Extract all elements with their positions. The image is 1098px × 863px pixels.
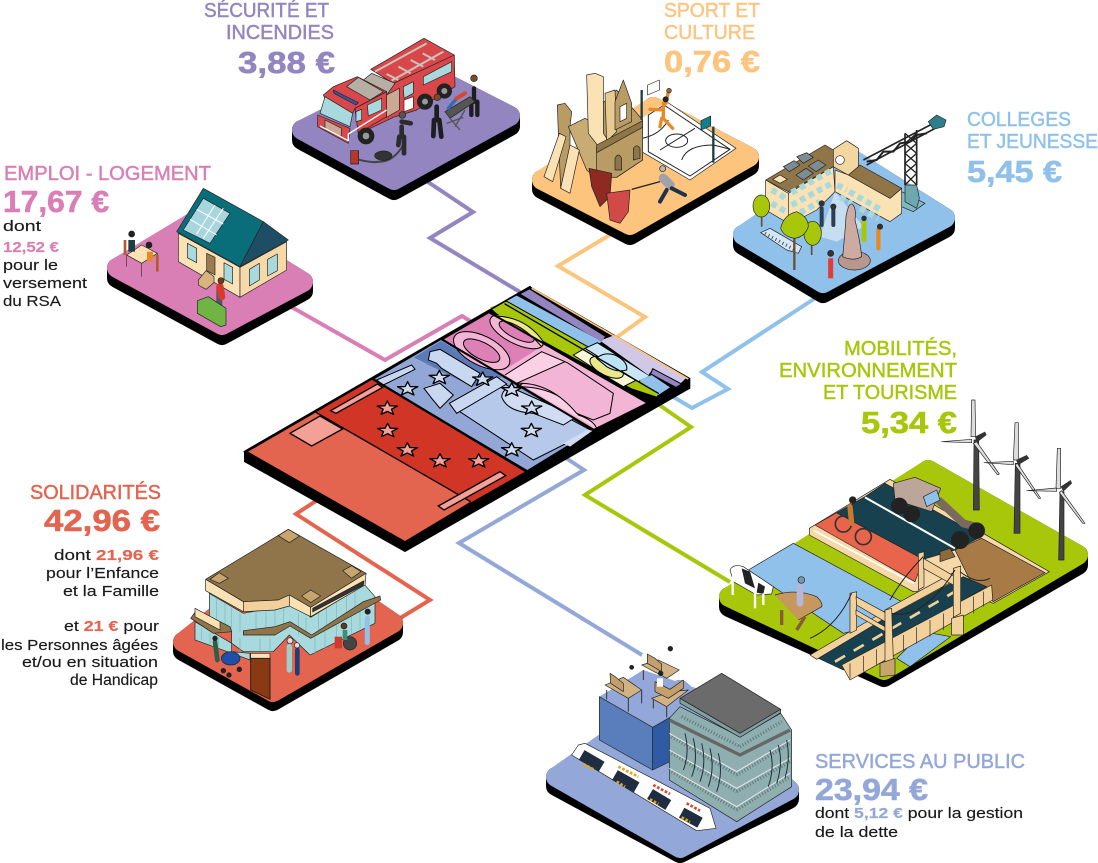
label: sport et culture: 0,76 € bbox=[664, 44, 760, 79]
panel: mobilités environnement et tourisme bbox=[729, 337, 1085, 680]
icon: castle, masks and sports court bbox=[544, 73, 736, 223]
label: solidarités: 42,96 € bbox=[44, 503, 160, 538]
label: sport et culture: SPORT ET bbox=[664, 0, 760, 22]
platform periwinkle bbox=[556, 690, 789, 853]
icon: school, crane, statue and students bbox=[753, 115, 946, 278]
label: solidarités: les Personnes âgées bbox=[1, 637, 158, 654]
label: solidarités: et/ou en situation bbox=[22, 654, 158, 671]
label: emploi logement: 12,52 € bbox=[3, 239, 60, 256]
label: emploi logement: pour le bbox=[3, 257, 58, 274]
label: mobilités: ET TOURISME bbox=[823, 382, 957, 404]
panel: sécurité et incendies bbox=[204, 0, 510, 190]
platform green bbox=[729, 470, 1078, 677]
label: collèges et jeunesse: 5,45 € bbox=[967, 154, 1062, 189]
label: services au public: SERVICES AU PUBLIC bbox=[815, 751, 1025, 773]
leader lines bbox=[288, 178, 820, 655]
label: emploi logement: versement bbox=[3, 275, 88, 292]
label: emploi logement bbox=[3, 163, 211, 310]
label: sécurité et incendies: SÉCURITÉ ET bbox=[204, 0, 329, 22]
label: solidarités: pour l’Enfance bbox=[46, 565, 159, 582]
label: services au public: de la dette bbox=[815, 824, 898, 841]
panel: services au public bbox=[556, 646, 1025, 853]
label: sport et culture: CULTURE bbox=[664, 22, 755, 44]
label: solidarités: de Handicap bbox=[70, 672, 158, 689]
platform orange bbox=[542, 107, 749, 235]
label: sécurité et incendies: INCENDIES bbox=[226, 22, 334, 44]
label: sécurité et incendies bbox=[204, 0, 335, 80]
label: services au public bbox=[815, 751, 1025, 841]
central banknote plate bbox=[244, 287, 690, 552]
label: solidarités: dont 21,96 € bbox=[54, 547, 160, 564]
platform purple bbox=[302, 70, 510, 190]
label: mobilités: 5,34 € bbox=[861, 405, 957, 440]
label: emploi logement: dont bbox=[3, 218, 42, 235]
panel: sport et culture bbox=[542, 0, 760, 235]
label: solidarités bbox=[1, 481, 161, 689]
label: emploi logement: du RSA bbox=[3, 293, 61, 310]
panel: solidarités bbox=[1, 481, 393, 701]
label: collèges et jeunesse: COLLEGES bbox=[967, 109, 1071, 131]
label: solidarités: SOLIDARITÉS bbox=[30, 481, 161, 504]
panel: collèges et jeunesse bbox=[743, 109, 1098, 293]
label: sport et culture bbox=[664, 0, 760, 79]
icon: building and people bbox=[191, 529, 381, 699]
label: sécurité et incendies: 3,88 € bbox=[238, 45, 335, 80]
label: collèges et jeunesse bbox=[967, 109, 1098, 189]
icon: house and figures bbox=[125, 188, 288, 327]
label: services au public: dont 5,12 € pour la gestion bbox=[815, 805, 1023, 822]
icon: offices, tower and tram bbox=[572, 646, 792, 831]
label: mobilités: MOBILITÉS, bbox=[844, 337, 957, 360]
label: solidarités: et 21 € pour bbox=[64, 618, 159, 635]
label: emploi logement: 17,67 € bbox=[3, 184, 109, 219]
platform pink bbox=[117, 218, 303, 335]
label: mobilités bbox=[779, 337, 957, 440]
label: services au public: 23,94 € bbox=[815, 772, 928, 807]
label: emploi logement: EMPLOI - LOGEMENT bbox=[4, 163, 211, 185]
platform light blue bbox=[743, 160, 945, 293]
panel: emploi logement bbox=[3, 163, 303, 335]
label: solidarités: et la Famille bbox=[63, 583, 159, 600]
label: mobilités: ENVIRONNEMENT bbox=[779, 360, 957, 382]
platform red bbox=[183, 555, 393, 701]
icon: road, river, bridge, turbines, animals bbox=[730, 400, 1085, 680]
icon: fire truck and firefighters bbox=[318, 38, 477, 164]
